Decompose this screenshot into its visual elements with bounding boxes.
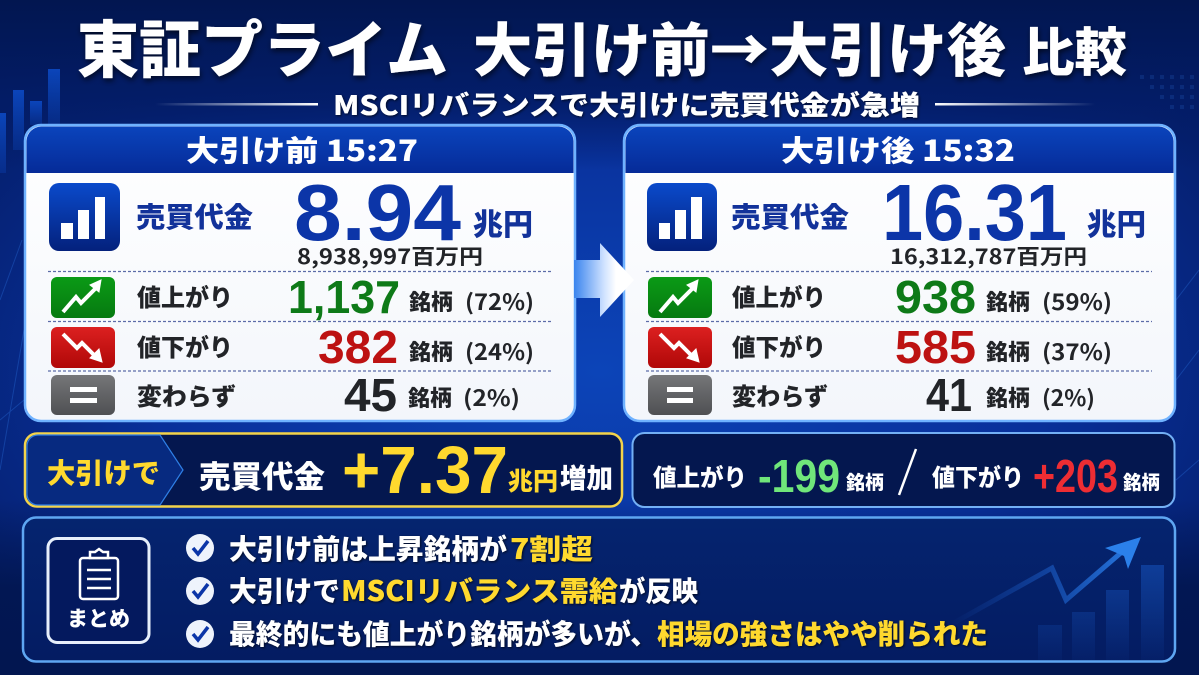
summary point 3: 最終的にも値上がり銘柄が多いが、: [229, 613, 657, 653]
row: unchanged: 41: [926, 369, 972, 421]
row: unchanged: 銘柄: [986, 381, 1030, 413]
row: advancers: 値上がり: [137, 278, 233, 313]
trading value: 売買代金: [731, 196, 849, 236]
row: decliners: 382: [318, 321, 398, 373]
chevron label: [27, 435, 183, 505]
panel header: after: 大引け後 15:32: [781, 128, 1015, 170]
title: 大引け前→大引け後: [473, 4, 1006, 88]
title: [77, 0, 1127, 90]
decorative rising chart: [950, 537, 1164, 660]
summary point 1: 7割超: [510, 528, 593, 568]
subtitle: MSCIリバランスで大引けに売買代金が急増: [333, 84, 920, 123]
trading value: 兆円: [1087, 200, 1146, 244]
summary badge: [48, 538, 149, 642]
summary point 2: [186, 570, 698, 610]
row: advancers: 1,137: [288, 271, 400, 323]
panel header: before: [26, 126, 574, 173]
summary point 2: MSCIリバランス需給: [341, 570, 618, 610]
row: decliners: 銘柄: [409, 335, 453, 367]
callout: trading value increase: +7.37: [342, 433, 508, 508]
row: advancers: (72%): [465, 285, 534, 317]
callout: trading value increase: 増加: [560, 457, 613, 496]
callout: advancers and decliners change: [632, 433, 1174, 507]
row: unchanged: [51, 369, 520, 421]
summary point 1: [186, 528, 593, 568]
row: advancers: [648, 271, 1112, 323]
icon: bar chart: [49, 183, 120, 251]
arrow between panels: [574, 243, 634, 317]
trading value: 16,312,787百万円: [890, 241, 1087, 271]
panel header: before: 大引け前 15:27: [186, 128, 418, 170]
panel: after close: [624, 125, 1175, 421]
row: unchanged: [648, 369, 1095, 421]
callout: advancers and decliners change: -199: [758, 450, 840, 502]
trading value: 売買代金: [136, 196, 253, 236]
callout: trading value increase: [25, 433, 622, 508]
row: decliners: 値下がり: [137, 328, 233, 363]
icon: bar chart: [647, 183, 717, 251]
callout: advancers and decliners change: 値下がり: [932, 458, 1024, 493]
row: unchanged: 変わらず: [137, 377, 236, 412]
row: unchanged: (2%): [1042, 381, 1095, 413]
summary badge: まとめ: [67, 603, 130, 633]
trading value: 8.94: [294, 168, 462, 257]
chevron label: 大引けで: [47, 452, 160, 492]
summary point 2: が反映: [619, 570, 698, 610]
title: 比較: [1022, 11, 1127, 86]
row: decliners: (24%): [465, 335, 534, 367]
summary point 2: 大引けで: [229, 570, 340, 610]
row: decliners: 値下がり: [732, 328, 826, 363]
trading value: 16.31: [882, 168, 1067, 257]
row: advancers: 938: [895, 271, 976, 323]
summary point 1: 大引け前は上昇銘柄が: [229, 528, 507, 568]
callout: trading value increase: 売買代金: [199, 452, 325, 497]
row: advancers: (59%): [1042, 285, 1112, 317]
row: unchanged: (2%): [463, 381, 520, 413]
row: decliners: 585: [895, 321, 976, 373]
panel header: after: [626, 126, 1174, 173]
callout: advancers and decliners change: +203: [1033, 450, 1118, 502]
panel: summary: [23, 518, 1175, 662]
trading value: [136, 168, 533, 271]
row: unchanged: 45: [344, 369, 397, 421]
icon: clipboard: [80, 549, 118, 599]
row: decliners: [51, 321, 534, 373]
callout: advancers and decliners change: 銘柄: [1123, 468, 1160, 495]
row: decliners: [648, 321, 1112, 373]
callout: advancers and decliners change: 値上がり: [653, 458, 747, 493]
row: advancers: [51, 271, 534, 323]
panel: before close: [25, 125, 575, 421]
row: unchanged: 変わらず: [732, 377, 828, 412]
row: advancers: 銘柄: [409, 285, 453, 317]
row: advancers: 値上がり: [732, 278, 826, 313]
row: unchanged: 銘柄: [408, 381, 452, 413]
title: 東証プライム: [77, 0, 448, 90]
summary point 3: [186, 613, 988, 653]
row: decliners: (37%): [1042, 335, 1112, 367]
callout: advancers and decliners change: 銘柄: [846, 468, 884, 495]
trading value: 兆円: [473, 200, 533, 244]
row: decliners: 銘柄: [986, 335, 1030, 367]
trading value: 8,938,997百万円: [297, 241, 483, 271]
trading value: [731, 168, 1146, 271]
callout: trading value increase: 兆円: [508, 462, 558, 498]
row: advancers: 銘柄: [986, 285, 1030, 317]
summary point 3: 相場の強さはやや削られた: [657, 613, 988, 653]
